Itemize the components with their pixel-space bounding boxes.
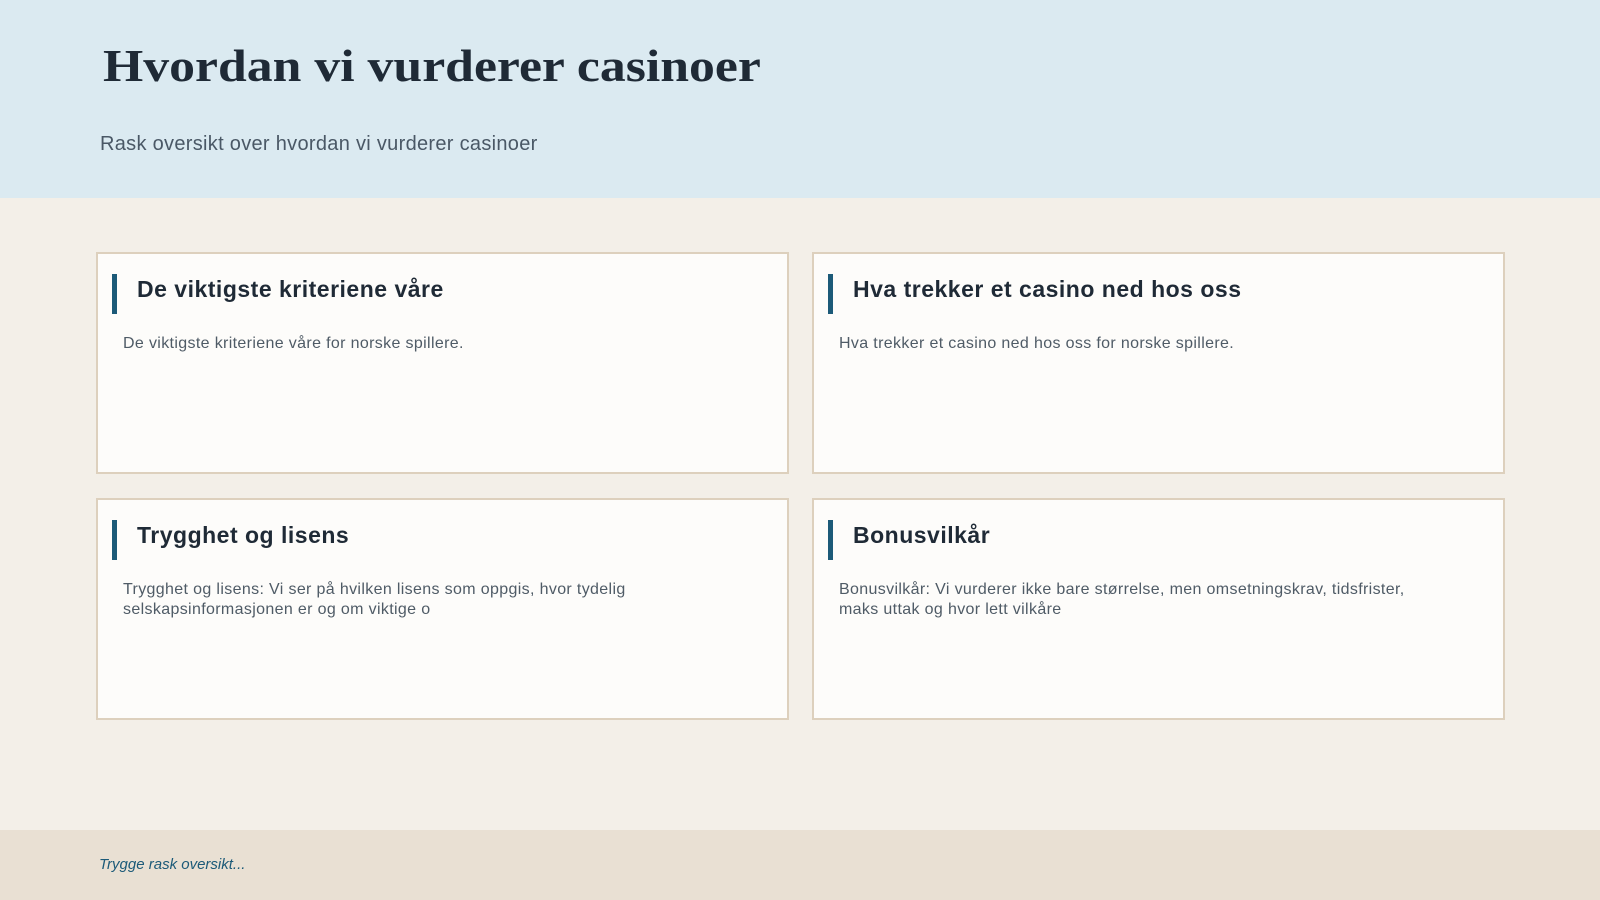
text: selskapsinformasjonen er og om viktige o	[123, 601, 430, 618]
panel: safety	[96, 498, 789, 720]
footer text: Trygge rask oversikt...	[99, 856, 245, 873]
subtitle: Rask oversikt over hvordan vi vurderer casinoer	[100, 133, 538, 155]
text: Hva trekker et casino ned hos oss for norske spillere.	[839, 335, 1234, 352]
header	[0, 0, 1600, 198]
text: maks uttak og hvor lett vilkåre	[839, 601, 1062, 618]
text: Bonusvilkår: Vi vurderer ikke bare størrelse, men omsetningskrav, tidsfrister,	[839, 581, 1405, 598]
text: Trygghet og lisens: Vi ser på hvilken lisens som oppgis, hvor tydelig	[123, 581, 626, 598]
heading: Bonusvilkår	[853, 522, 990, 548]
text	[839, 581, 1405, 618]
text: De viktigste kriteriene våre for norske spillere.	[123, 335, 464, 352]
footer	[0, 830, 1600, 900]
heading: Trygghet og lisens	[137, 522, 349, 548]
heading: De viktigste kriteriene våre	[137, 276, 444, 302]
panel: bonus	[812, 498, 1505, 720]
panel: negatives	[812, 252, 1505, 474]
heading: Hva trekker et casino ned hos oss	[853, 276, 1242, 302]
panel: criteria	[96, 252, 789, 474]
title: Hvordan vi vurderer casinoer	[103, 40, 761, 91]
text	[123, 581, 626, 618]
